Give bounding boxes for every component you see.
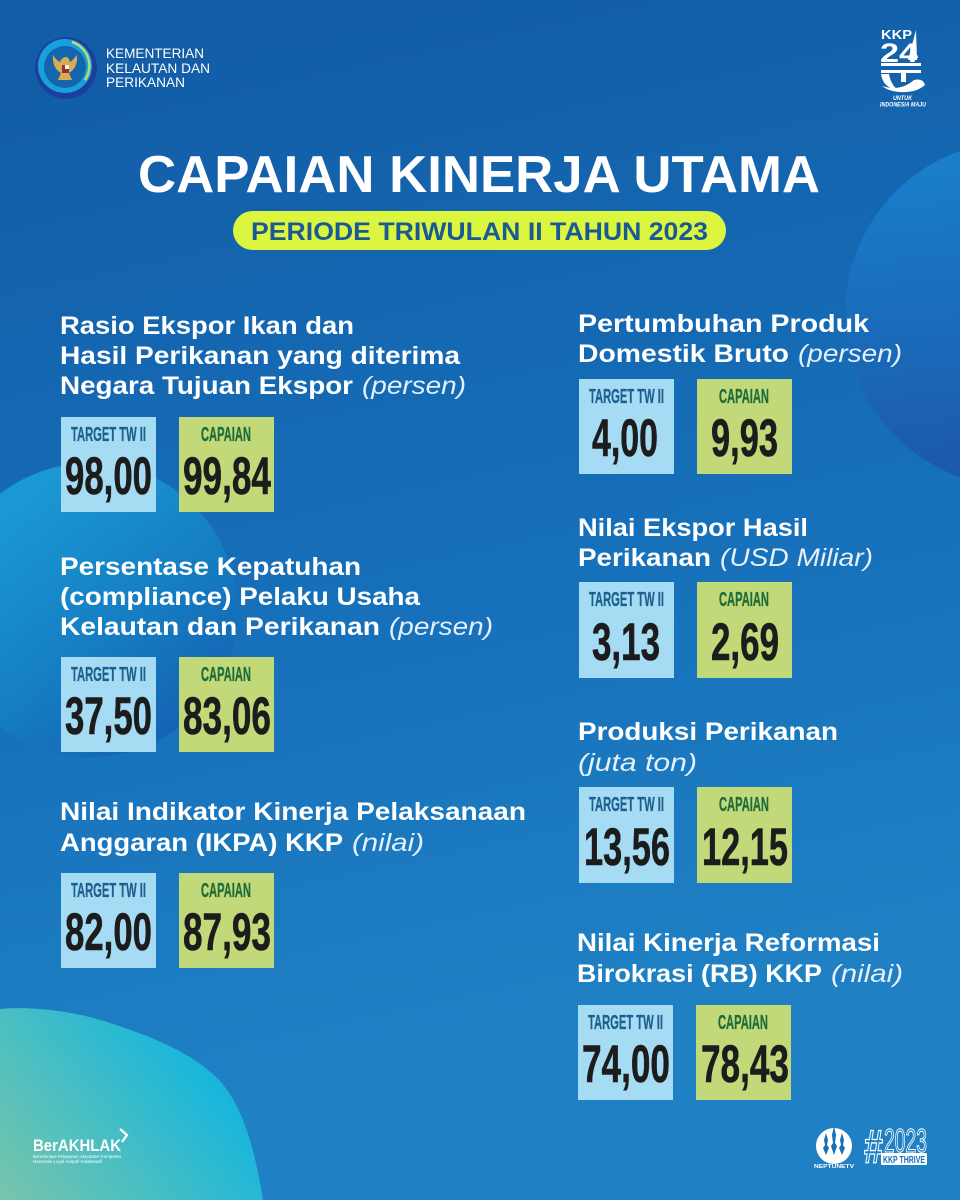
heading: (nilai) <box>352 829 424 857</box>
heading: Negara Tujuan Ekspor <box>60 372 353 400</box>
heading <box>60 798 526 857</box>
target box: 13,56 <box>584 818 670 877</box>
panel: PDB <box>578 310 902 474</box>
target box <box>61 417 156 512</box>
panel: produksi perikanan <box>578 718 838 883</box>
heading <box>578 310 902 368</box>
achievement box: 12,15 <box>702 818 788 877</box>
organisation name <box>106 45 210 90</box>
logo: BerAKHLAK: Berorientasi Pelayanan Akuntabel Kompeten <box>33 1154 121 1159</box>
panel: reformasi birokrasi <box>577 929 903 1100</box>
heading <box>577 929 903 988</box>
target box <box>579 582 674 678</box>
achievement box: CAPAIAN <box>719 589 769 611</box>
heading: Perikanan <box>578 544 711 572</box>
period pill: PERIODE TRIWULAN II TAHUN 2023 <box>251 218 708 246</box>
target box: 4,00 <box>592 409 658 468</box>
title: CAPAIAN KINERJA UTAMA <box>138 146 820 204</box>
logo: BerAKHLAK <box>33 1129 127 1164</box>
logo: Kementerian Kelautan dan Perikanan <box>35 37 210 99</box>
heading: (persen) <box>389 613 493 641</box>
logo: KKP 24 <box>880 27 926 108</box>
heading: (juta ton) <box>578 749 697 777</box>
heading: (USD Miliar) <box>720 544 873 572</box>
heading: Anggaran (IKPA) KKP <box>60 829 343 857</box>
heading <box>60 312 466 400</box>
heading: Persentase Kepatuhan <box>60 553 361 581</box>
period pill <box>233 211 726 250</box>
achievement box <box>179 417 274 512</box>
icon: ministry emblem <box>35 37 97 99</box>
organisation name: KEMENTERIAN <box>106 45 204 61</box>
heading: (persen) <box>798 340 902 368</box>
target box: 82,00 <box>65 903 152 962</box>
target box <box>579 379 674 474</box>
achievement box: CAPAIAN <box>201 664 251 686</box>
target box <box>61 657 156 752</box>
achievement box: 78,43 <box>701 1035 789 1094</box>
logo: Neptune TV <box>814 1126 854 1170</box>
target box <box>579 787 674 883</box>
logo: KKP 24: UNTUK <box>893 95 913 102</box>
achievement box: CAPAIAN <box>718 1012 768 1034</box>
achievement box: CAPAIAN <box>201 424 251 446</box>
heading: Kelautan dan Perikanan <box>60 613 380 641</box>
target box: TARGET TW II <box>71 664 146 686</box>
achievement box: 2,69 <box>711 613 779 672</box>
heading: (persen) <box>362 372 466 400</box>
heading: Birokrasi (RB) KKP <box>577 960 822 988</box>
achievement box: CAPAIAN <box>719 794 769 816</box>
panel: kepatuhan <box>60 553 493 752</box>
heading: Nilai Ekspor Hasil <box>578 514 808 542</box>
heading: Domestik Bruto <box>578 340 789 368</box>
logo: BerAKHLAK: BerAKHLAK <box>33 1136 122 1155</box>
logo: Neptune TV: NEPTUNETV <box>814 1164 854 1170</box>
organisation name: PERIKANAN <box>106 74 185 90</box>
logo: #2023 KKP Thrive: KKP THRIVE <box>883 1154 925 1166</box>
achievement box <box>697 582 792 678</box>
target box: TARGET TW II <box>71 880 146 902</box>
panel: nilai ekspor <box>578 514 873 678</box>
target box: 98,00 <box>65 447 152 506</box>
heading <box>60 553 493 641</box>
target box: 74,00 <box>582 1035 670 1094</box>
achievement box <box>697 379 792 474</box>
achievement box: 99,84 <box>183 447 271 506</box>
achievement box <box>696 1005 791 1100</box>
target box <box>578 1005 673 1100</box>
panel: rasio ekspor <box>60 312 466 512</box>
heading: Pertumbuhan Produk <box>578 310 869 338</box>
heading: Produksi Perikanan <box>578 718 838 746</box>
achievement box: 83,06 <box>183 687 271 746</box>
target box: TARGET TW II <box>589 386 664 408</box>
achievement box: CAPAIAN <box>201 880 251 902</box>
target box: TARGET TW II <box>588 1012 663 1034</box>
heading <box>578 718 838 777</box>
logo: BerAKHLAK: Harmonis Loyal Adaptif Kolaboratif <box>33 1159 103 1164</box>
logo: #2023 KKP Thrive: # <box>864 1120 883 1173</box>
target box: TARGET TW II <box>71 424 146 446</box>
heading <box>578 514 873 572</box>
heading: (nilai) <box>831 960 903 988</box>
decorative circle: left middle <box>0 463 237 757</box>
organisation name: KELAUTAN DAN <box>106 60 210 76</box>
target box: 3,13 <box>592 613 660 672</box>
heading: (compliance) Pelaku Usaha <box>60 583 421 611</box>
logo: #2023 KKP Thrive <box>864 1120 927 1173</box>
heading: Hasil Perikanan yang diterima <box>60 342 461 370</box>
target box: 37,50 <box>65 687 152 746</box>
logo: KKP 24: 24 <box>880 38 918 68</box>
panel: IKPA <box>60 798 526 968</box>
decorative circle: top right <box>845 151 960 477</box>
logo: KKP 24: INDONESIA MAJU <box>880 102 926 108</box>
achievement box: 87,93 <box>183 903 271 962</box>
logo: #2023 KKP Thrive: 2023 <box>884 1122 927 1159</box>
achievement box: 9,93 <box>711 409 778 468</box>
heading: Nilai Indikator Kinerja Pelaksanaan <box>60 798 526 826</box>
achievement box <box>179 873 274 968</box>
achievement box: CAPAIAN <box>719 386 769 408</box>
achievement box <box>697 787 792 883</box>
achievement box <box>179 657 274 752</box>
target box: TARGET TW II <box>589 794 664 816</box>
target box <box>61 873 156 968</box>
heading: Nilai Kinerja Reformasi <box>577 929 880 957</box>
target box: TARGET TW II <box>589 589 664 611</box>
decorative blob: bottom left <box>0 1008 263 1200</box>
logo: KKP 24: KKP <box>881 27 912 42</box>
heading: Rasio Ekspor Ikan dan <box>60 312 354 340</box>
